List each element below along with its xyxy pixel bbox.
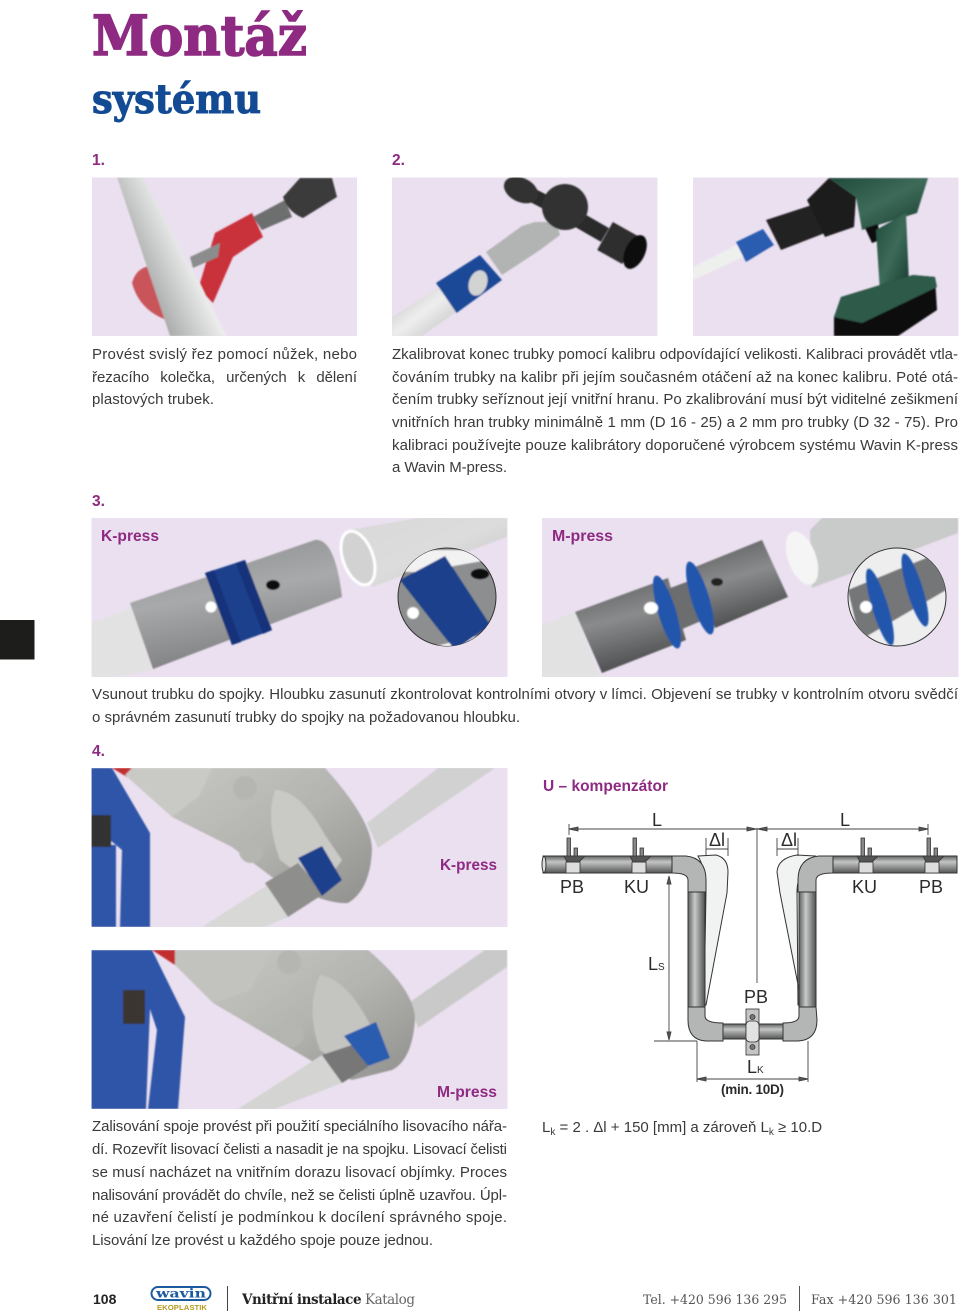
label: K-press: K-press	[440, 857, 497, 874]
text block: step 3: Vsunout trubku do spojky. Hloubku zasunutí zkontrolovat kontrolními otvory v límci. Objevení se trubky v kontrolním otvoru svědčí	[92, 686, 959, 703]
label: M-press: M-press	[437, 1084, 497, 1101]
logo: Wavin Ekoplastik: wavin	[155, 1286, 206, 1300]
formula: ≥ 10.D	[774, 1119, 822, 1136]
dimension lines	[569, 824, 928, 1082]
ghost displaced pipes	[698, 855, 815, 1005]
formula: = 2 . Δl + 150 [mm] a zároveň L	[555, 1119, 769, 1136]
logo: Wavin Ekoplastik	[152, 1286, 210, 1312]
detail circle	[848, 548, 946, 648]
diagram labels: Δl	[781, 830, 797, 850]
label: K-press: K-press	[101, 528, 159, 545]
text block: step 2: kalibraci používejte pouze kalibrátory doporučené výrobcem systému Wavin K-press	[392, 437, 958, 454]
fax: Fax +420 596 136 301	[811, 1293, 957, 1308]
text block: step 1: Provést svislý řez pomocí nůžek, nebo	[92, 346, 357, 363]
text block: step 2: čením trubky seříznout její vnitřní hranu. Po zkalibrování musí být viditelné zešikmení	[392, 391, 959, 408]
diagram labels	[560, 810, 943, 1097]
diagram labels: KU	[852, 877, 877, 897]
pipes	[542, 856, 957, 1041]
step number 3: 3.	[92, 493, 105, 510]
text block: step 4: Zalisování spoje provést při použití speciálního lisovacího nářa-	[92, 1118, 507, 1135]
text block: step 4	[92, 1118, 507, 1249]
diagram labels: (min. 10D)	[721, 1082, 784, 1097]
diagram labels: PB	[560, 877, 584, 897]
footer	[93, 1286, 957, 1312]
formula: L	[542, 1119, 550, 1136]
diagram: U compensator	[542, 810, 957, 1097]
text block: step 3: o správném zasunutí trubky do spojky na požadovanou hloubku.	[92, 709, 520, 726]
diagram labels: KU	[624, 877, 649, 897]
heading: U-kompenzátor: U – kompenzátor	[543, 778, 668, 795]
panel: K-press fitting	[91, 518, 508, 677]
formula: k	[769, 1127, 775, 1138]
diagram labels: Δl	[709, 830, 725, 850]
text block: step 4: Lisování lze provést u každého spoje pouze jednou.	[92, 1232, 433, 1249]
title	[92, 3, 307, 123]
diagram labels: PB	[744, 987, 768, 1007]
text block: step 4: dí. Rozevřít lisovací čelisti a nasadit je na spojku. Lisovací čelisti	[92, 1141, 507, 1158]
text block: step 4: né uzavření čelistí je podmínkou k docílení správného spoje.	[92, 1209, 507, 1226]
phone: Tel. +420 596 136 295	[643, 1293, 787, 1308]
diagram labels: LS	[648, 954, 665, 974]
text block: step 2: Zkalibrovat konec trubky pomocí kalibru odpovídající velikosti. Kalibraci provádět vtla-	[392, 346, 958, 363]
detail circle	[398, 548, 500, 650]
text block: step 3	[92, 686, 959, 726]
text block: step 2: čováním trubky na kalibr při jejím současném otáčení až na konec kalibru. Poté otá-	[392, 369, 958, 386]
panel: K-press pressing tool	[91, 768, 508, 927]
text block: step 4: se musí nacházet na vnitřním dorazu lisovací objímky. Proces	[92, 1164, 507, 1181]
text block: step 1	[92, 346, 358, 408]
text block: step 2: vnitřních hran trubky minimálně 1 mm (D 16 - 25) a 2 mm pro trubky (D 32 - 75). Pro	[392, 414, 958, 431]
pipe clamps	[564, 838, 944, 1055]
diagram labels: L	[652, 810, 662, 830]
title: systému	[92, 76, 261, 123]
logo: Wavin Ekoplastik: EKOPLASTIK	[157, 1305, 207, 1312]
panel: calibrator on drill	[693, 178, 958, 336]
panel: M-press pressing tool	[91, 950, 508, 1109]
text block: step 2: a Wavin M-press.	[392, 459, 507, 476]
title: Montáž	[92, 3, 307, 68]
diagram labels: L	[840, 810, 850, 830]
formula: k	[550, 1127, 556, 1138]
text block: step 1: plastových trubek.	[92, 391, 214, 408]
step number 4: 4.	[92, 743, 105, 760]
text block: step 4: nalisování provádět do chvíle, než se čelisti úplně uzavřou. Úpl-	[92, 1187, 507, 1204]
panel: calibrator with T-handle	[392, 172, 658, 336]
step number 2: 2.	[392, 152, 405, 169]
catalog title: Vnitřní instalace Katalog	[241, 1292, 415, 1308]
diagram labels: PB	[919, 877, 943, 897]
side tab	[0, 620, 34, 660]
step number 1: 1.	[92, 152, 105, 169]
diagram labels: LK	[747, 1057, 764, 1077]
text block: step 2	[392, 346, 959, 476]
text block: step 1: řezacího kolečka, určených k dělení	[92, 369, 358, 386]
label: M-press: M-press	[552, 528, 613, 545]
panel: pipe cutter	[92, 177, 357, 336]
page number: 108	[93, 1291, 117, 1307]
panel: M-press fitting	[542, 518, 958, 677]
